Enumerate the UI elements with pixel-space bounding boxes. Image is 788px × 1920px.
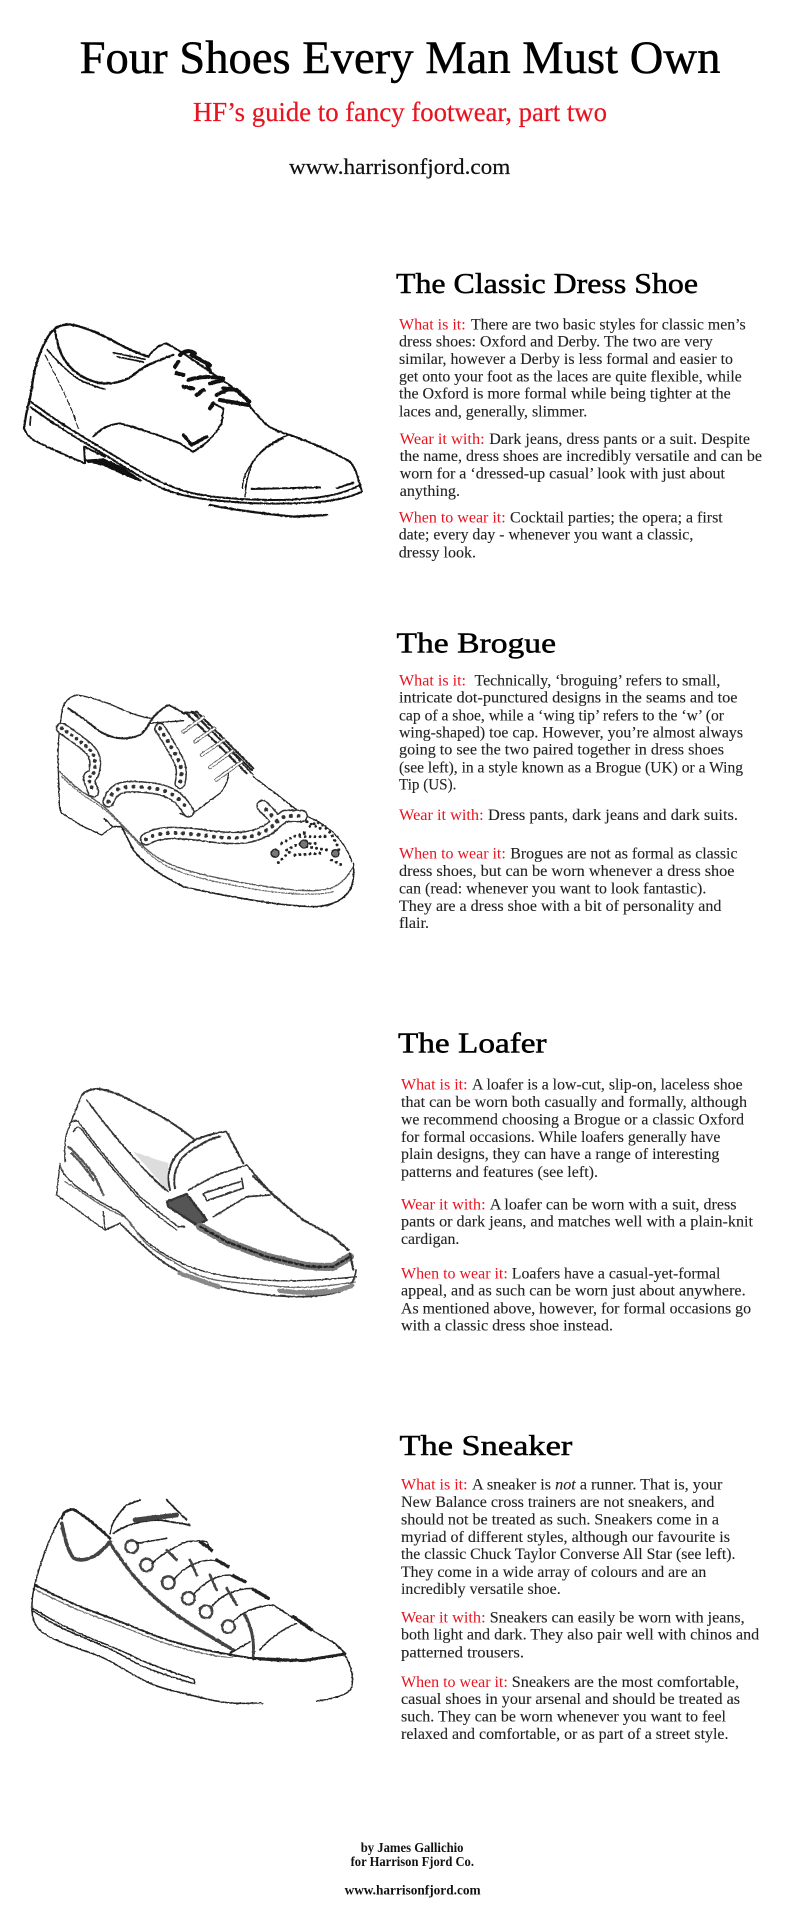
- text block: wear it with: worn for a ‘dressed-up casual’ look with just about: [400, 465, 725, 483]
- heading: the classic dress shoe: The Classic Dress Shoe: [396, 268, 698, 300]
- footer credits: www.harrisonfjord.com: [345, 1883, 481, 1898]
- icon: loafer drawing: [57, 1089, 357, 1297]
- text block: wear it with: both light and dark. They also pair well with chinos and: [401, 1626, 759, 1644]
- text block: what is it: [399, 671, 743, 793]
- text block: wear it with: [401, 1609, 759, 1662]
- text block: what is it: New Balance cross trainers are not sneakers, and: [401, 1493, 714, 1511]
- text block: when to wear it: When to wear it:: [401, 1673, 508, 1691]
- text block: when to wear it: When to wear it:: [401, 1264, 508, 1282]
- text block: when to wear it: with a classic dress shoe instead.: [401, 1316, 613, 1334]
- text block: what is it: for formal occasions. While loafers generally have: [401, 1128, 720, 1146]
- text block: what is it: Technically, ‘broguing’ refers to small,: [474, 671, 720, 689]
- text block: when to wear it: They are a dress shoe with a bit of personality and: [399, 897, 721, 915]
- text block: wear it with: anything.: [400, 482, 460, 500]
- text block: wear it with: A loafer can be worn with a suit, dress: [490, 1195, 736, 1213]
- text block: what is it: the classic Chuck Taylor Converse All Star (see left).: [401, 1545, 736, 1563]
- text block: when to wear it: [401, 1264, 751, 1334]
- text block: when to wear it: Loafers have a casual-yet-formal: [512, 1264, 721, 1282]
- text block: what is it: Tip (US).: [399, 775, 456, 793]
- text block: wear it with: the name, dress shoes are incredibly versatile and can be: [400, 447, 762, 465]
- text block: wear it with: Wear it with:: [401, 1609, 486, 1627]
- text block: what is it: incredibly versatile shoe.: [401, 1580, 561, 1598]
- text block: what is it: What is it:: [401, 1476, 468, 1494]
- text block: wear it with: cardigan.: [401, 1230, 459, 1248]
- text block: when to wear it: dress shoes, but can be worn whenever a dress shoe: [399, 862, 734, 880]
- text block: what is it: A sneaker is not a runner. That is, your: [472, 1476, 723, 1494]
- panel: loafer: [57, 1028, 753, 1334]
- text block: what is it: plain designs, they can have a range of interesting: [401, 1145, 719, 1163]
- text block: what is it: similar, however a Derby is less formal and easier to: [399, 350, 733, 368]
- panel: classic dress shoe: [24, 268, 762, 561]
- website link: www.harrisonfjord.com: [289, 154, 510, 179]
- text block: what is it: What is it:: [399, 671, 466, 689]
- subtitle: HF’s guide to fancy footwear, part two: [193, 97, 607, 127]
- text block: wear it with: patterned trousers.: [401, 1644, 524, 1662]
- text block: what is it: should not be treated as such. Sneakers come in a: [401, 1511, 719, 1529]
- text block: what is it: What is it:: [399, 315, 466, 333]
- text block: wear it with: Dress pants, dark jeans and dark suits.: [488, 806, 738, 824]
- text block: what is it: A loafer is a low-cut, slip-on, laceless shoe: [472, 1076, 743, 1094]
- text block: when to wear it: Brogues are not as formal as classic: [510, 845, 738, 863]
- text block: when to wear it: Sneakers are the most comfortable,: [512, 1673, 739, 1691]
- text block: wear it with: Wear it with:: [400, 430, 485, 448]
- panel: brogue: [58, 628, 743, 932]
- text block: when to wear it: relaxed and comfortable, or as part of a street style.: [401, 1725, 728, 1743]
- text block: when to wear it: Cocktail parties; the opera; a first: [510, 508, 723, 526]
- text block: when to wear it: When to wear it:: [399, 508, 506, 526]
- text block: what is it: [401, 1076, 747, 1181]
- text block: when to wear it: such. They can be worn whenever you want to feel: [401, 1708, 726, 1726]
- text block: when to wear it: [399, 508, 723, 561]
- text block: what is it: we recommend choosing a Brogue or a classic Oxford: [401, 1111, 744, 1129]
- text block: wear it with: Wear it with:: [399, 806, 484, 824]
- text block: when to wear it: date; every day - whenever you want a classic,: [399, 526, 693, 544]
- text block: what is it: intricate dot-punctured designs in the seams and toe: [399, 689, 738, 707]
- text block: wear it with: Sneakers can easily be worn with jeans,: [490, 1609, 745, 1627]
- text block: what is it: [399, 315, 746, 421]
- text block: when to wear it: appeal, and as such can be worn just about anywhere.: [401, 1282, 746, 1300]
- text block: what is it: What is it:: [401, 1076, 468, 1094]
- text block: what is it: They come in a wide array of colours and are an: [401, 1563, 706, 1581]
- title: Four Shoes Every Man Must Own: [80, 32, 720, 84]
- text block: when to wear it: dressy look.: [399, 543, 476, 561]
- text block: what is it: get onto your foot as the laces are quite flexible, while: [399, 368, 742, 386]
- footer credits: [345, 1840, 481, 1898]
- footer credits: by James Gallichio: [361, 1840, 464, 1855]
- icon: brogue shoe drawing: [58, 695, 354, 907]
- panel: sneaker: [32, 1430, 759, 1743]
- text block: when to wear it: When to wear it:: [399, 845, 506, 863]
- text block: what is it: (see left), in a style known as a Brogue (UK) or a Wing: [399, 758, 743, 776]
- text block: what is it: that can be worn both casually and formally, although: [401, 1093, 747, 1111]
- heading: the loafer: The Loafer: [398, 1028, 547, 1060]
- text block: what is it: There are two basic styles for classic men’s: [471, 315, 746, 333]
- text block: what is it: cap of a shoe, while a ‘wing tip’ refers to the ‘w’ (or: [399, 706, 725, 724]
- icon: sneaker drawing: [32, 1500, 352, 1703]
- text block: when to wear it: As mentioned above, however, for formal occasions go: [401, 1299, 751, 1317]
- text block: what is it: going to see the two paired together in dress shoes: [399, 741, 724, 759]
- text block: when to wear it: can (read: whenever you want to look fantastic).: [399, 880, 706, 898]
- text block: wear it with: Dark jeans, dress pants or a suit. Despite: [489, 430, 750, 448]
- text block: when to wear it: [401, 1673, 740, 1743]
- heading: the brogue: The Brogue: [396, 628, 556, 660]
- text block: what is it: dress shoes: Oxford and Derby. The two are very: [399, 333, 714, 351]
- text block: what is it: the Oxford is more formal while being tighter at the: [399, 385, 731, 403]
- text block: wear it with: pants or dark jeans, and matches well with a plain-knit: [401, 1212, 753, 1230]
- footer credits: for Harrison Fjord Co.: [351, 1854, 474, 1869]
- text block: what is it: myriad of different styles, although our favourite is: [401, 1528, 730, 1546]
- text block: what is it: laces and, generally, slimmer.: [399, 403, 587, 421]
- heading: the sneaker: The Sneaker: [400, 1430, 573, 1462]
- text block: when to wear it: [399, 845, 738, 932]
- text block: what is it: wing-shaped) toe cap. However, you’re almost always: [399, 724, 743, 742]
- text block: when to wear it: casual shoes in your arsenal and should be treated as: [401, 1690, 740, 1708]
- text block: when to wear it: flair.: [399, 914, 429, 932]
- text block: what is it: patterns and features (see left).: [401, 1163, 598, 1181]
- text block: what is it: [401, 1476, 736, 1598]
- icon: classic dress shoe drawing: [24, 325, 362, 517]
- text block: wear it with: [401, 1195, 753, 1248]
- text block: wear it with: Wear it with:: [401, 1195, 486, 1213]
- text block: wear it with: [400, 430, 762, 500]
